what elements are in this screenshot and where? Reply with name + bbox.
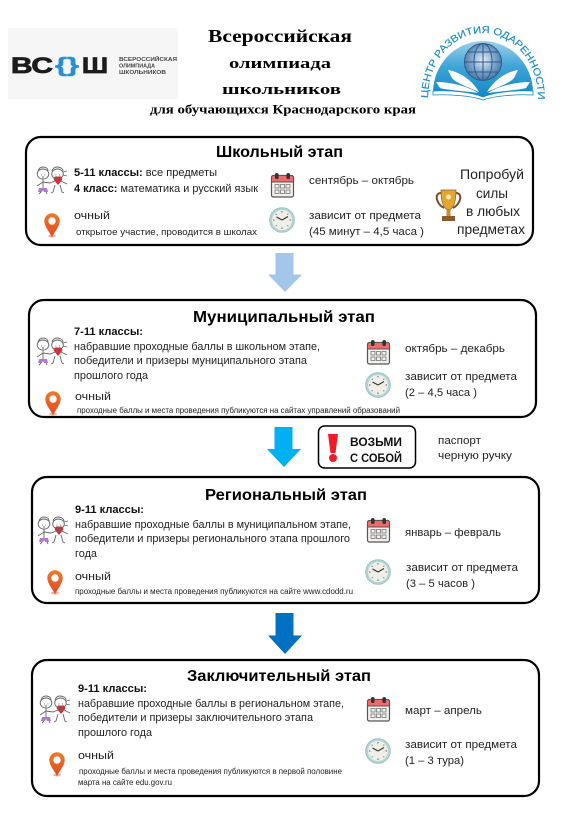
duration: (3 – 5 часов ) — [406, 578, 475, 590]
title — [150, 26, 416, 116]
heading: Региональный этап — [205, 487, 367, 504]
participants: набравшие проходные баллы в муниципальном этапе, — [75, 519, 351, 531]
icon: clock — [366, 739, 390, 763]
dates: март – апрель — [405, 705, 482, 717]
icon: calendar — [272, 173, 294, 197]
participants: прошлого года — [74, 370, 149, 382]
callout: take with you — [318, 426, 416, 468]
participants — [74, 326, 320, 382]
dates: октябрь – декабрь — [405, 343, 505, 355]
icon: location pin — [44, 213, 60, 238]
panel: Заключительный этап — [32, 660, 539, 796]
dates: январь – февраль — [405, 527, 501, 539]
icon: children — [38, 517, 68, 544]
format: открытое участие, проводится в школах — [76, 227, 257, 238]
arrow: to final stage — [268, 613, 302, 654]
duration: зависит от предмета — [309, 210, 422, 222]
title: для обучающихся Краснодарского края — [150, 102, 416, 116]
participants — [78, 683, 344, 739]
duration — [406, 562, 519, 590]
format — [75, 571, 353, 596]
title: школьников — [222, 82, 341, 98]
motto: Попробуй — [460, 166, 524, 182]
title: Всероссийская — [208, 26, 352, 46]
participants: 9-11 классы: — [78, 683, 147, 695]
logo: ВСОШ: ВСЕРОССИЙСКАЯ — [119, 55, 177, 63]
duration: (1 – 3 тура) — [405, 755, 464, 767]
icon: clock — [366, 560, 390, 584]
icon: calendar — [368, 697, 390, 721]
panel: Региональный этап — [32, 477, 539, 603]
format — [75, 391, 400, 415]
panel: Муниципальный этап — [29, 300, 536, 417]
format: очный — [78, 750, 114, 762]
heading: Школьный этап — [216, 144, 343, 161]
participants — [75, 504, 351, 560]
format: очный — [75, 391, 111, 403]
format: очный — [75, 571, 111, 583]
icon: trophy — [437, 190, 460, 221]
participants: 5-11 классы: все предметы — [74, 167, 217, 179]
motto — [457, 166, 525, 237]
dates: сентябрь – октябрь — [309, 175, 414, 187]
participants: победители и призеры заключительного этапа — [78, 712, 314, 724]
items to bring: паспорт — [438, 435, 481, 447]
participants: набравшие проходные баллы в региональном этапе, — [78, 698, 344, 710]
icon: calendar — [368, 518, 390, 542]
arrow: to municipal stage — [268, 253, 302, 292]
icon: children — [37, 338, 67, 365]
callout: take with you: С СОБОЙ — [350, 450, 402, 465]
format: проходные баллы и места проведения публикуются в первой половине — [79, 767, 343, 776]
format — [74, 210, 257, 238]
motto: силы — [476, 185, 508, 201]
panel: Школьный этап — [26, 137, 533, 245]
duration — [309, 210, 424, 238]
duration: зависит от предмета — [405, 371, 518, 383]
participants: набравшие проходные баллы в школьном этапе, — [74, 341, 320, 353]
participants: победители и призеры регионального этапа прошлого — [75, 533, 350, 545]
icon: clock — [366, 373, 390, 397]
icon: clock — [270, 208, 294, 232]
duration: (2 – 4,5 часа ) — [405, 387, 477, 399]
participants: года — [75, 548, 98, 560]
logo: ВСОШ: Ш — [82, 53, 108, 78]
heading: Заключительный этап — [187, 668, 371, 685]
duration: зависит от предмета — [405, 739, 518, 751]
items to bring — [438, 435, 512, 462]
icon: children — [37, 167, 67, 194]
participants: прошлого года — [78, 727, 153, 739]
callout: take with you: ВОЗЬМИ — [350, 435, 402, 449]
format — [78, 750, 343, 787]
duration: зависит от предмета — [406, 562, 519, 574]
heading: Муниципальный этап — [193, 309, 375, 326]
participants: 7-11 классы: — [74, 326, 143, 338]
participants: 9-11 классы: — [75, 504, 144, 516]
participants — [74, 167, 258, 195]
title: олимпиада — [229, 56, 332, 72]
logo: ВСОШ: ОЛИМПИАДА — [119, 64, 155, 70]
format: марта на сайте edu.gov.ru — [78, 778, 172, 787]
icon: location pin — [45, 391, 61, 416]
duration — [405, 739, 518, 767]
items to bring: черную ручку — [438, 450, 512, 462]
motto: в любых — [466, 203, 520, 219]
icon: calendar — [368, 340, 390, 364]
icon: location pin — [47, 570, 63, 594]
participants: победители и призеры муниципального этапа — [74, 355, 308, 367]
duration: (45 минут – 4,5 часа ) — [309, 226, 424, 238]
format: проходные баллы и места проведения публикуются на сайтах управлений образований — [77, 406, 400, 415]
logo: Центр развития одаренности: ЦЕНТР РАЗВИТИЯ ОДАРЕННОСТИ — [420, 26, 546, 99]
duration — [405, 371, 518, 399]
logo: ВСОШ: ВС — [11, 53, 53, 78]
format: проходные баллы и места проведения публикуются на сайте www.cdodd.ru — [75, 587, 353, 596]
participants: 4 класс: математика и русский язык — [74, 183, 258, 195]
logo: ВСОШ: {} — [55, 55, 79, 77]
motto: предметах — [457, 221, 525, 237]
logo: ВСОШ: ШКОЛЬНИКОВ — [119, 70, 166, 76]
header — [8, 26, 546, 116]
format: очный — [74, 210, 110, 222]
icon: location pin — [49, 752, 65, 776]
logo: ВСОШ — [8, 28, 178, 99]
icon: children — [40, 696, 70, 723]
arrow: to regional stage — [267, 427, 301, 467]
